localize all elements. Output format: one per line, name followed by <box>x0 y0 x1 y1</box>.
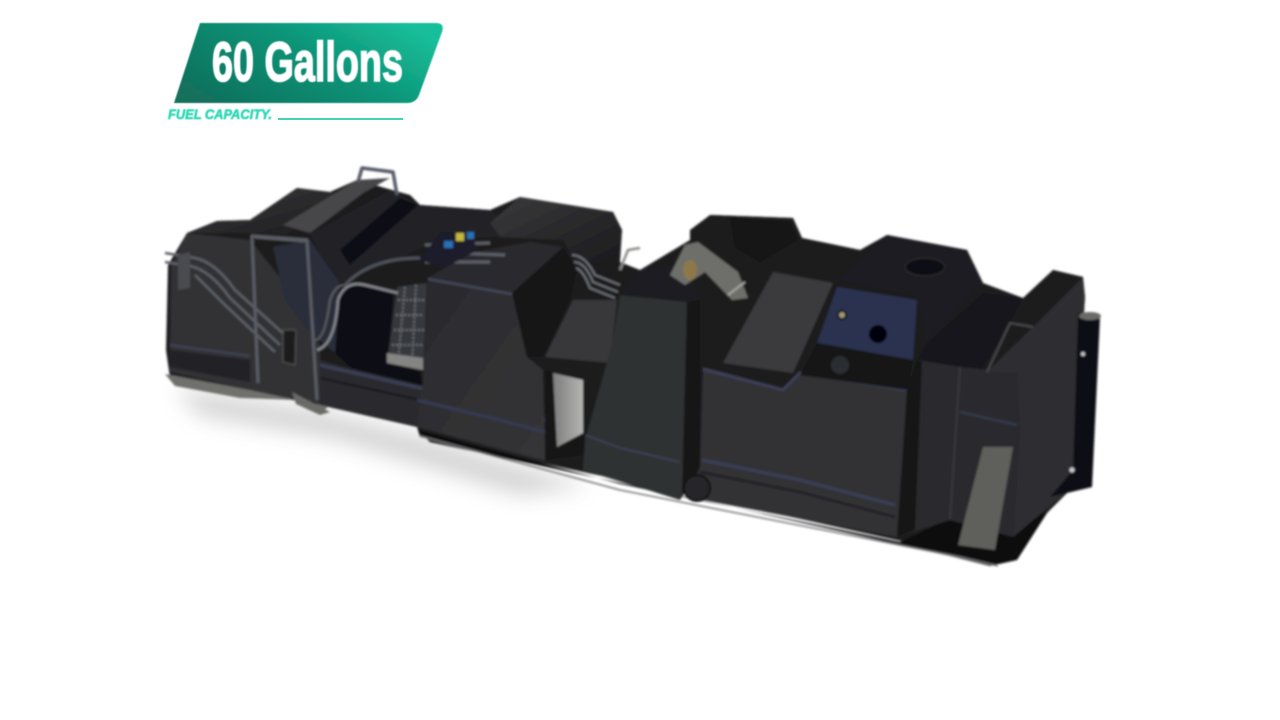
rear recess <box>273 240 340 353</box>
mounting bracket <box>958 447 1013 550</box>
fuel tank illustration <box>165 168 1101 566</box>
underline rule <box>278 118 403 120</box>
tall frame <box>252 236 317 400</box>
center clip <box>283 330 296 365</box>
fuel lines right <box>572 255 620 298</box>
large front section <box>687 369 907 537</box>
badge: 60 Gallons fuel capacity <box>168 23 443 122</box>
label: fuel capacity: FUEL CAPACITY. <box>168 106 272 122</box>
right middle section <box>897 360 1020 537</box>
ground shadow <box>175 388 590 495</box>
base plate <box>165 374 1047 566</box>
central recess <box>335 283 423 388</box>
right side rail <box>1050 312 1101 497</box>
top cap <box>905 258 945 276</box>
shoulder section <box>917 293 1023 372</box>
right end box <box>987 270 1085 537</box>
upper rear box <box>283 178 520 283</box>
middle box <box>417 242 577 460</box>
left section <box>170 188 350 405</box>
blue panel <box>817 287 917 360</box>
lower body band <box>320 360 545 462</box>
top handle <box>358 168 397 195</box>
connecting section <box>545 300 617 460</box>
small clip <box>620 248 640 270</box>
bolt on step <box>831 356 849 374</box>
dark step under panel <box>800 343 913 390</box>
lower frame foot <box>292 392 330 415</box>
back silhouette <box>166 180 1085 562</box>
heading: 60 Gallons: 60 Gallons <box>212 30 403 93</box>
left clip <box>178 252 190 290</box>
filler neck <box>670 242 748 300</box>
silver heat shield <box>553 373 583 447</box>
banner background <box>174 23 443 103</box>
small fitting <box>838 311 846 319</box>
fill port hole <box>869 325 887 343</box>
left fuel lines <box>165 253 285 352</box>
rear fuel box <box>490 197 622 262</box>
lower bolt <box>684 475 710 501</box>
section A <box>583 265 700 500</box>
mesh filter <box>387 283 427 370</box>
connectors and fuel lines <box>315 232 505 350</box>
rear top section <box>690 215 860 373</box>
upper right box <box>837 235 983 343</box>
